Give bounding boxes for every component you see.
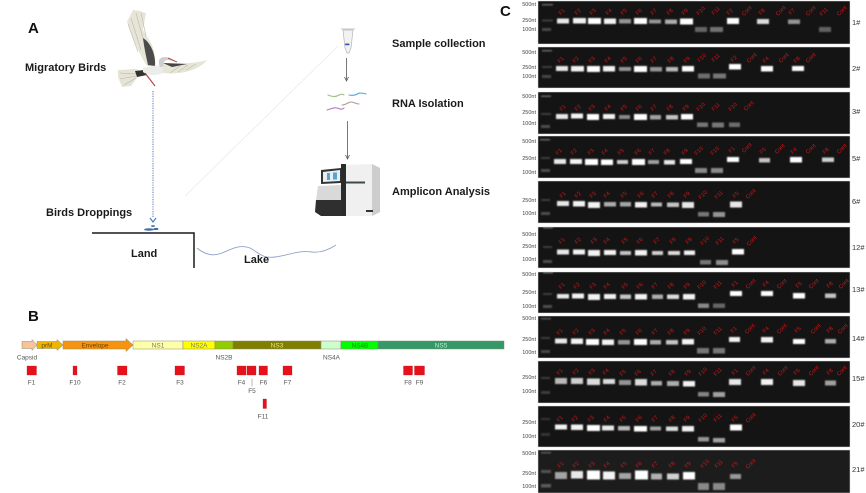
icon: sequencing machine xyxy=(315,164,380,216)
gel: sample 13#: 250nt xyxy=(522,290,536,296)
gel: sample 13#: F2 xyxy=(573,282,582,291)
gene: prM xyxy=(37,340,63,350)
gel: sample 1#: F7 xyxy=(650,8,659,17)
gel: sample 3#: F4 xyxy=(604,104,613,113)
gene names: Envelope xyxy=(81,342,109,350)
gel: sample 12#: F5 xyxy=(732,237,741,246)
gel: sample 2#: F7 xyxy=(650,56,659,65)
gel: sample 2#: F9 xyxy=(683,56,692,65)
gel: sample 13#: F5 xyxy=(621,282,630,291)
gel: sample 6#: 100nt xyxy=(522,211,536,217)
gel: sample 6#: F4 xyxy=(603,191,612,200)
gel: sample 3#: F5 xyxy=(620,104,629,113)
fragment labels: F1 xyxy=(28,380,36,386)
gel: sample 21#: 250nt xyxy=(522,471,536,477)
gel: sample 21#: F5 xyxy=(620,461,629,470)
gel: sample 20#: Cont xyxy=(745,412,758,425)
gel: sample 15#: F7 xyxy=(650,369,659,378)
gel: sample 14#: F11 xyxy=(713,326,724,337)
fragment labels: F11 xyxy=(258,414,269,420)
gel: sample 15#: F5 xyxy=(793,368,802,377)
gel: sample 21#: Cont xyxy=(745,458,758,471)
label: Lake: Lake xyxy=(244,254,269,266)
gel: sample 2#: F4 xyxy=(604,56,613,65)
gel: sample 14#: 100nt xyxy=(522,350,536,356)
gel: sample 12#: F5 xyxy=(621,237,630,246)
gel: sample 2#: F2 xyxy=(572,56,581,65)
gel: sample 3#: F9 xyxy=(682,104,691,113)
gel: sample 6#: F3 xyxy=(589,191,598,200)
gel: sample 1#: Cont xyxy=(805,5,818,18)
gel: sample 20#: F8 xyxy=(668,415,677,424)
gel: sample 1#: F11 xyxy=(711,6,722,17)
gel: sample 20#: 250nt xyxy=(522,420,536,426)
gel: sample 5#: F9 xyxy=(681,148,690,157)
fragment labels: F5 xyxy=(248,388,256,395)
fragment labels: F2 xyxy=(118,380,126,386)
gel: sample 14#: Cont xyxy=(776,323,789,336)
gel: sample 20#: F1 xyxy=(556,415,565,424)
gel: sample 12#: Cont xyxy=(746,235,759,248)
gel: sample 5#: F8 xyxy=(663,148,672,157)
gel: sample 15#: Cont xyxy=(777,365,790,378)
gene: NS4B xyxy=(341,341,378,349)
gene names: NS2B xyxy=(216,354,232,362)
faint sampling line xyxy=(185,46,338,196)
gel: sample 1#: F10 xyxy=(696,6,707,17)
gene: NS1 xyxy=(133,341,183,349)
gel: sample 20#: F6 xyxy=(635,415,644,424)
gel: sample 14#: F6 xyxy=(635,328,644,337)
gel: sample 21#: F1 xyxy=(557,461,566,470)
gel: sample 2#: F1 xyxy=(557,56,566,65)
gel: sample 15#: F6 xyxy=(634,369,643,378)
gel: sample 3#: 100nt xyxy=(522,121,536,127)
gene: Capsid xyxy=(22,340,37,350)
gel: sample 1#: Cont xyxy=(836,5,849,18)
gel: sample 14#: F1 xyxy=(730,326,739,335)
gel: sample 13#: Cont xyxy=(745,278,758,291)
gene names: NS4A xyxy=(323,354,341,362)
gene names xyxy=(17,342,448,362)
gel: sample 14#: F1 xyxy=(556,328,565,337)
gel: sample 14# xyxy=(522,316,865,358)
gel: sample 5#: F4 xyxy=(601,148,610,157)
gel: sample 1#: Cont xyxy=(775,5,788,18)
gel: sample 21#: F6 xyxy=(635,461,644,470)
gel: sample 5#: 250nt xyxy=(522,156,536,162)
arrow: RNA to analysis xyxy=(346,121,350,159)
gel: sample 13#: Cont xyxy=(808,278,821,291)
gel: sample 1#: 500nt xyxy=(522,2,536,8)
gel: sample 5#: F6 xyxy=(634,148,643,157)
gel: sample 2#: F8 xyxy=(667,56,676,65)
gel: sample 5#: F1 xyxy=(555,148,564,157)
gel: sample 12#: 100nt xyxy=(522,257,536,263)
gel: sample 6#: Cont xyxy=(745,188,758,201)
gel: sample 14#: 500nt xyxy=(522,316,536,322)
gel: sample 20#: F7 xyxy=(651,415,660,424)
heading: Amplicon Analysis: Amplicon Analysis xyxy=(392,186,490,198)
gel: sample 15#: F11 xyxy=(713,367,724,378)
gel: sample 12#: F10 xyxy=(700,236,711,247)
gel: sample 1#: 100nt xyxy=(522,27,536,33)
gel: sample 2# xyxy=(522,47,861,88)
gel: sample 20#: F10 xyxy=(698,413,709,424)
gel: sample 6#: F9 xyxy=(683,191,692,200)
gel: sample 20#: F5 xyxy=(619,415,628,424)
gel: sample 15#: F8 xyxy=(826,368,835,377)
gel: sample 3#: F1 xyxy=(559,104,568,113)
gel: sample 6#: F2 xyxy=(574,191,583,200)
gel: sample 5#: F10 xyxy=(694,146,705,157)
gel: sample 1#: 250nt xyxy=(522,18,536,24)
genome polyprotein xyxy=(22,338,504,352)
gel: sample 5#: Cont xyxy=(774,143,787,156)
gel: sample 15#: F8 xyxy=(668,369,677,378)
gel: sample 21#: F3 xyxy=(588,461,597,470)
gel: sample 21#: F2 xyxy=(572,461,581,470)
gel: sample 6#: F5 xyxy=(732,191,741,200)
gene: NS2A xyxy=(183,341,215,349)
gene names: NS4B xyxy=(352,342,368,350)
gel: sample 21#: F8 xyxy=(668,461,677,470)
gel: sample 5#: 100nt xyxy=(522,170,536,176)
gel: sample 20#: F4 xyxy=(603,415,612,424)
gel: sample 14#: F4 xyxy=(603,328,612,337)
gel: sample 12#: 500nt xyxy=(522,232,536,238)
gel: sample 2#: Cont xyxy=(746,52,759,65)
gel: sample 15#: Cont xyxy=(745,365,758,378)
panel: C gel electrophoresis xyxy=(500,1,865,493)
gel: sample 3#: F10 xyxy=(696,102,707,113)
gel: sample 5#: F5 xyxy=(617,148,626,157)
gel: sample 1#: F11 xyxy=(819,7,830,18)
gel: sample 15#: F2 xyxy=(572,368,581,377)
gel: sample 12#: F4 xyxy=(603,237,612,246)
gel: sample 15#: 250nt xyxy=(522,375,536,381)
dotted arrow: droppings falling xyxy=(150,91,156,222)
gel: sample 13#: F10 xyxy=(697,280,708,291)
gel: sample 3#: F8 xyxy=(666,104,675,113)
gel: sample 5#: F5 xyxy=(759,147,768,156)
heading: Migratory Birds: Migratory Birds xyxy=(25,62,106,74)
gel: sample 15#: Cont xyxy=(836,365,849,378)
gel: sample 1#: F7 xyxy=(788,8,797,17)
gel: sample 6#: F10 xyxy=(698,190,709,201)
fragment labels: F7 xyxy=(284,380,292,386)
gel: sample 2#: F6 xyxy=(635,56,644,65)
gel: sample 15#: F1 xyxy=(556,368,565,377)
gel: sample 13#: F4 xyxy=(603,282,612,291)
gel: sample 1#: F1 xyxy=(558,8,567,17)
arrow: tube to RNA xyxy=(344,58,348,81)
gel: sample 1#: F2 xyxy=(574,8,583,17)
gel: sample 12#: F11 xyxy=(715,236,726,247)
gel: sample 6#: F8 xyxy=(667,191,676,200)
gel: sample 21#: F11 xyxy=(714,459,725,470)
gel: sample 13#: 100nt xyxy=(522,304,536,310)
gel: sample 6#: 250nt xyxy=(522,198,536,204)
gel: sample 13#: 500nt xyxy=(522,272,536,278)
gel: sample 14#: F8 xyxy=(667,328,676,337)
gel: sample 20#: F9 xyxy=(683,415,692,424)
gel: sample 20# xyxy=(522,406,865,447)
gene names: prM xyxy=(41,342,53,350)
gel: sample 13#: F11 xyxy=(713,280,724,291)
gel: sample 14#: Cont xyxy=(810,323,823,336)
gene: Envelope xyxy=(63,338,133,352)
gel: sample 15# xyxy=(522,361,865,403)
fragment labels: F9 xyxy=(416,380,424,386)
panel: A sampling workflow xyxy=(25,10,490,268)
gel: sample 1#: F9 xyxy=(681,8,690,17)
gel: sample 1#: F8 xyxy=(758,8,767,17)
gene names: NS3 xyxy=(271,342,284,350)
gene names: NS5 xyxy=(435,342,448,350)
icon: droppings xyxy=(144,225,158,231)
gel: sample 14#: F9 xyxy=(683,328,692,337)
gel: sample 3#: F6 xyxy=(635,104,644,113)
gel: sample 5#: F8 xyxy=(822,147,831,156)
gel: sample 14#: F4 xyxy=(762,326,771,335)
gel: sample 2#: F10 xyxy=(697,53,708,64)
gel: sample 15#: F1 xyxy=(731,368,740,377)
gel: sample 5#: Cont xyxy=(836,143,849,156)
gel: sample 20#: F3 xyxy=(587,415,596,424)
gel: sample 3# xyxy=(522,92,861,134)
gel: sample 15#: 100nt xyxy=(522,389,536,395)
gel: sample 14#: Cont xyxy=(837,323,850,336)
gel: sample 14#: F5 xyxy=(619,328,628,337)
gel: sample 20#: 20# xyxy=(852,420,865,429)
gel: sample 5#: F1 xyxy=(728,146,737,155)
gene: NS3 xyxy=(233,341,321,349)
icon: flying stork xyxy=(118,10,207,87)
gel: sample 3#: 250nt xyxy=(522,110,536,116)
gel: sample 14#: F10 xyxy=(697,326,708,337)
gel: sample 21#: F4 xyxy=(603,461,612,470)
fragment labels: F10 xyxy=(69,380,81,386)
lake wave xyxy=(197,245,336,257)
icon: sample tube xyxy=(341,29,355,53)
gene: NS2B xyxy=(215,341,233,349)
icon: RNA strands xyxy=(327,93,366,110)
gel: sample 6#: F11 xyxy=(714,190,725,201)
gel: sample 12#: 250nt xyxy=(522,244,536,250)
gel: sample 20#: F2 xyxy=(571,415,580,424)
gel: sample 13#: F5 xyxy=(795,281,804,290)
gel: sample 1#: 1# xyxy=(852,18,861,27)
gel: sample 1#: F5 xyxy=(620,8,629,17)
gel: sample 2#: F2 xyxy=(730,55,739,64)
gel: sample 12#: F7 xyxy=(653,237,662,246)
gel: sample 6#: 6# xyxy=(852,197,861,206)
gel: sample 13#: F3 xyxy=(589,282,598,291)
gel: sample 2#: 500nt xyxy=(522,50,536,56)
gel: sample 5#: F4 xyxy=(790,147,799,156)
gel: sample 2#: F8 xyxy=(793,56,802,65)
gel: sample 14#: F3 xyxy=(588,328,597,337)
panel: B genome map xyxy=(17,308,504,420)
gene: NS4A xyxy=(321,341,341,349)
gel: sample 12#: F6 xyxy=(636,237,645,246)
gel: sample 13#: F9 xyxy=(683,282,692,291)
gel: sample 15#: F9 xyxy=(684,369,693,378)
gel: sample 21#: 21# xyxy=(852,465,865,474)
label: Land: Land xyxy=(131,248,157,260)
gel: sample 3#: F3 xyxy=(588,104,597,113)
gel: sample 12#: F8 xyxy=(669,237,678,246)
gel: sample 6#: F1 xyxy=(559,191,568,200)
gel: sample 13# xyxy=(522,272,865,313)
fragment labels: F4 xyxy=(238,380,246,386)
gel: sample 15#: F10 xyxy=(698,367,709,378)
gel: sample 6#: F5 xyxy=(620,191,629,200)
gel: sample 2#: F4 xyxy=(762,56,771,65)
gel: sample 3#: F2 xyxy=(574,104,583,113)
gel: sample 3#: Cont xyxy=(743,100,756,113)
gel: sample 5# xyxy=(522,136,861,178)
gel: sample 2#: F11 xyxy=(711,53,722,64)
gel: sample 3#: 3# xyxy=(852,107,861,116)
gel: sample 15#: Cont xyxy=(808,365,821,378)
gel: sample 12#: F1 xyxy=(558,237,567,246)
heading: RNA Isolation: RNA Isolation xyxy=(392,98,464,110)
gel: sample 14#: 14# xyxy=(852,334,865,343)
gel: sample 5#: Cont xyxy=(805,143,818,156)
gel: sample 5#: 5# xyxy=(852,154,861,163)
gel: sample 2#: 2# xyxy=(852,64,861,73)
gel: sample 1#: F8 xyxy=(666,8,675,17)
gel: sample 1# xyxy=(522,1,861,44)
gel: sample 5#: F7 xyxy=(648,148,657,157)
gel: sample 15#: F3 xyxy=(588,368,597,377)
gel: sample 3#: 500nt xyxy=(522,94,536,100)
gel: sample 2#: 250nt xyxy=(522,65,536,71)
gel: sample 21#: 500nt xyxy=(522,451,536,457)
gel: sample 12# xyxy=(522,227,865,268)
gel: sample 20#: 100nt xyxy=(522,434,536,440)
gel: sample 14#: 250nt xyxy=(522,337,536,343)
gel: sample 13#: F1 xyxy=(558,282,567,291)
gel: sample 13#: F4 xyxy=(762,280,771,289)
gel: sample 2#: 100nt xyxy=(522,74,536,80)
gel: sample 12#: F9 xyxy=(685,237,694,246)
gel: sample 15#: F5 xyxy=(619,369,628,378)
gel: sample 15#: F4 xyxy=(602,368,611,377)
gel: sample 12#: F2 xyxy=(574,237,583,246)
gel: sample 14#: F8 xyxy=(826,326,835,335)
gel: sample 21#: F10 xyxy=(700,459,711,470)
gel: sample 13#: Cont xyxy=(838,278,851,291)
gel: sample 13#: F6 xyxy=(636,282,645,291)
gel: sample 21#: 100nt xyxy=(522,484,536,490)
gel: sample 5#: 500nt xyxy=(522,139,536,145)
gel: sample 13#: 13# xyxy=(852,285,865,294)
fragment labels: F8 xyxy=(404,380,412,386)
gel: sample 20#: F5 xyxy=(731,415,740,424)
fragment labels: F3 xyxy=(176,380,184,386)
gel: sample 15#: 15# xyxy=(852,374,865,383)
gel: sample 3#: F7 xyxy=(650,104,659,113)
panel label C: C xyxy=(500,3,511,20)
gel: sample 14#: F7 xyxy=(651,328,660,337)
fragment labels xyxy=(28,378,424,420)
gel: sample 20#: F11 xyxy=(713,413,724,424)
gel: sample 1#: F2 xyxy=(726,8,735,17)
land outline xyxy=(92,233,194,268)
panel label B: B xyxy=(28,308,39,325)
amplicon fragments xyxy=(27,366,424,408)
gel: sample 1#: Cont xyxy=(741,5,754,18)
gel: sample 12#: 12# xyxy=(852,243,865,252)
gel: sample 2#: Cont xyxy=(805,52,818,65)
gel: sample 13#: Cont xyxy=(776,278,789,291)
gel: sample 15#: F4 xyxy=(762,368,771,377)
gene names: NS2A xyxy=(191,342,208,350)
gel: sample 14#: F5 xyxy=(794,326,803,335)
gel: sample 13#: F7 xyxy=(651,282,660,291)
gel: sample 1#: F4 xyxy=(605,8,614,17)
gel: sample 1#: F3 xyxy=(589,8,598,17)
gel: sample 21# xyxy=(522,450,865,493)
gel: sample 14#: F2 xyxy=(572,328,581,337)
gene names: NS1 xyxy=(152,342,165,350)
gel: sample 6# xyxy=(522,181,861,223)
gel: sample 1#: F6 xyxy=(635,8,644,17)
gel: sample 6#: F6 xyxy=(637,191,646,200)
gene: NS5 xyxy=(378,341,504,349)
gel: sample 12#: F3 xyxy=(590,237,599,246)
gel: sample 13#: F8 xyxy=(667,282,676,291)
gel: sample 5#: F10 xyxy=(710,146,721,157)
gel: sample 21#: F9 xyxy=(684,461,693,470)
heading: Birds Droppings: Birds Droppings xyxy=(46,207,132,219)
gene names: Capsid xyxy=(17,354,38,362)
gel: sample 14#: Cont xyxy=(744,323,757,336)
gel: sample 5#: Cont xyxy=(741,142,754,155)
gel: sample 21#: F7 xyxy=(651,461,660,470)
gel: sample 2#: Cont xyxy=(778,52,791,65)
gel: sample 5#: F3 xyxy=(587,148,596,157)
panel label A: A xyxy=(28,20,39,37)
gel: sample 3#: F10 xyxy=(728,102,739,113)
heading: Sample collection: Sample collection xyxy=(392,38,486,50)
gel: sample 5#: F2 xyxy=(570,148,579,157)
gel: sample 21#: F5 xyxy=(731,461,740,470)
gel: sample 13#: F8 xyxy=(826,281,835,290)
fragment labels: F6 xyxy=(260,380,268,386)
gel: sample 13#: F1 xyxy=(731,280,740,289)
gel: sample 3#: F11 xyxy=(711,102,722,113)
gel: sample 6#: F7 xyxy=(651,191,660,200)
gel: sample 2#: F5 xyxy=(620,56,629,65)
gel: sample 2#: F3 xyxy=(588,56,597,65)
